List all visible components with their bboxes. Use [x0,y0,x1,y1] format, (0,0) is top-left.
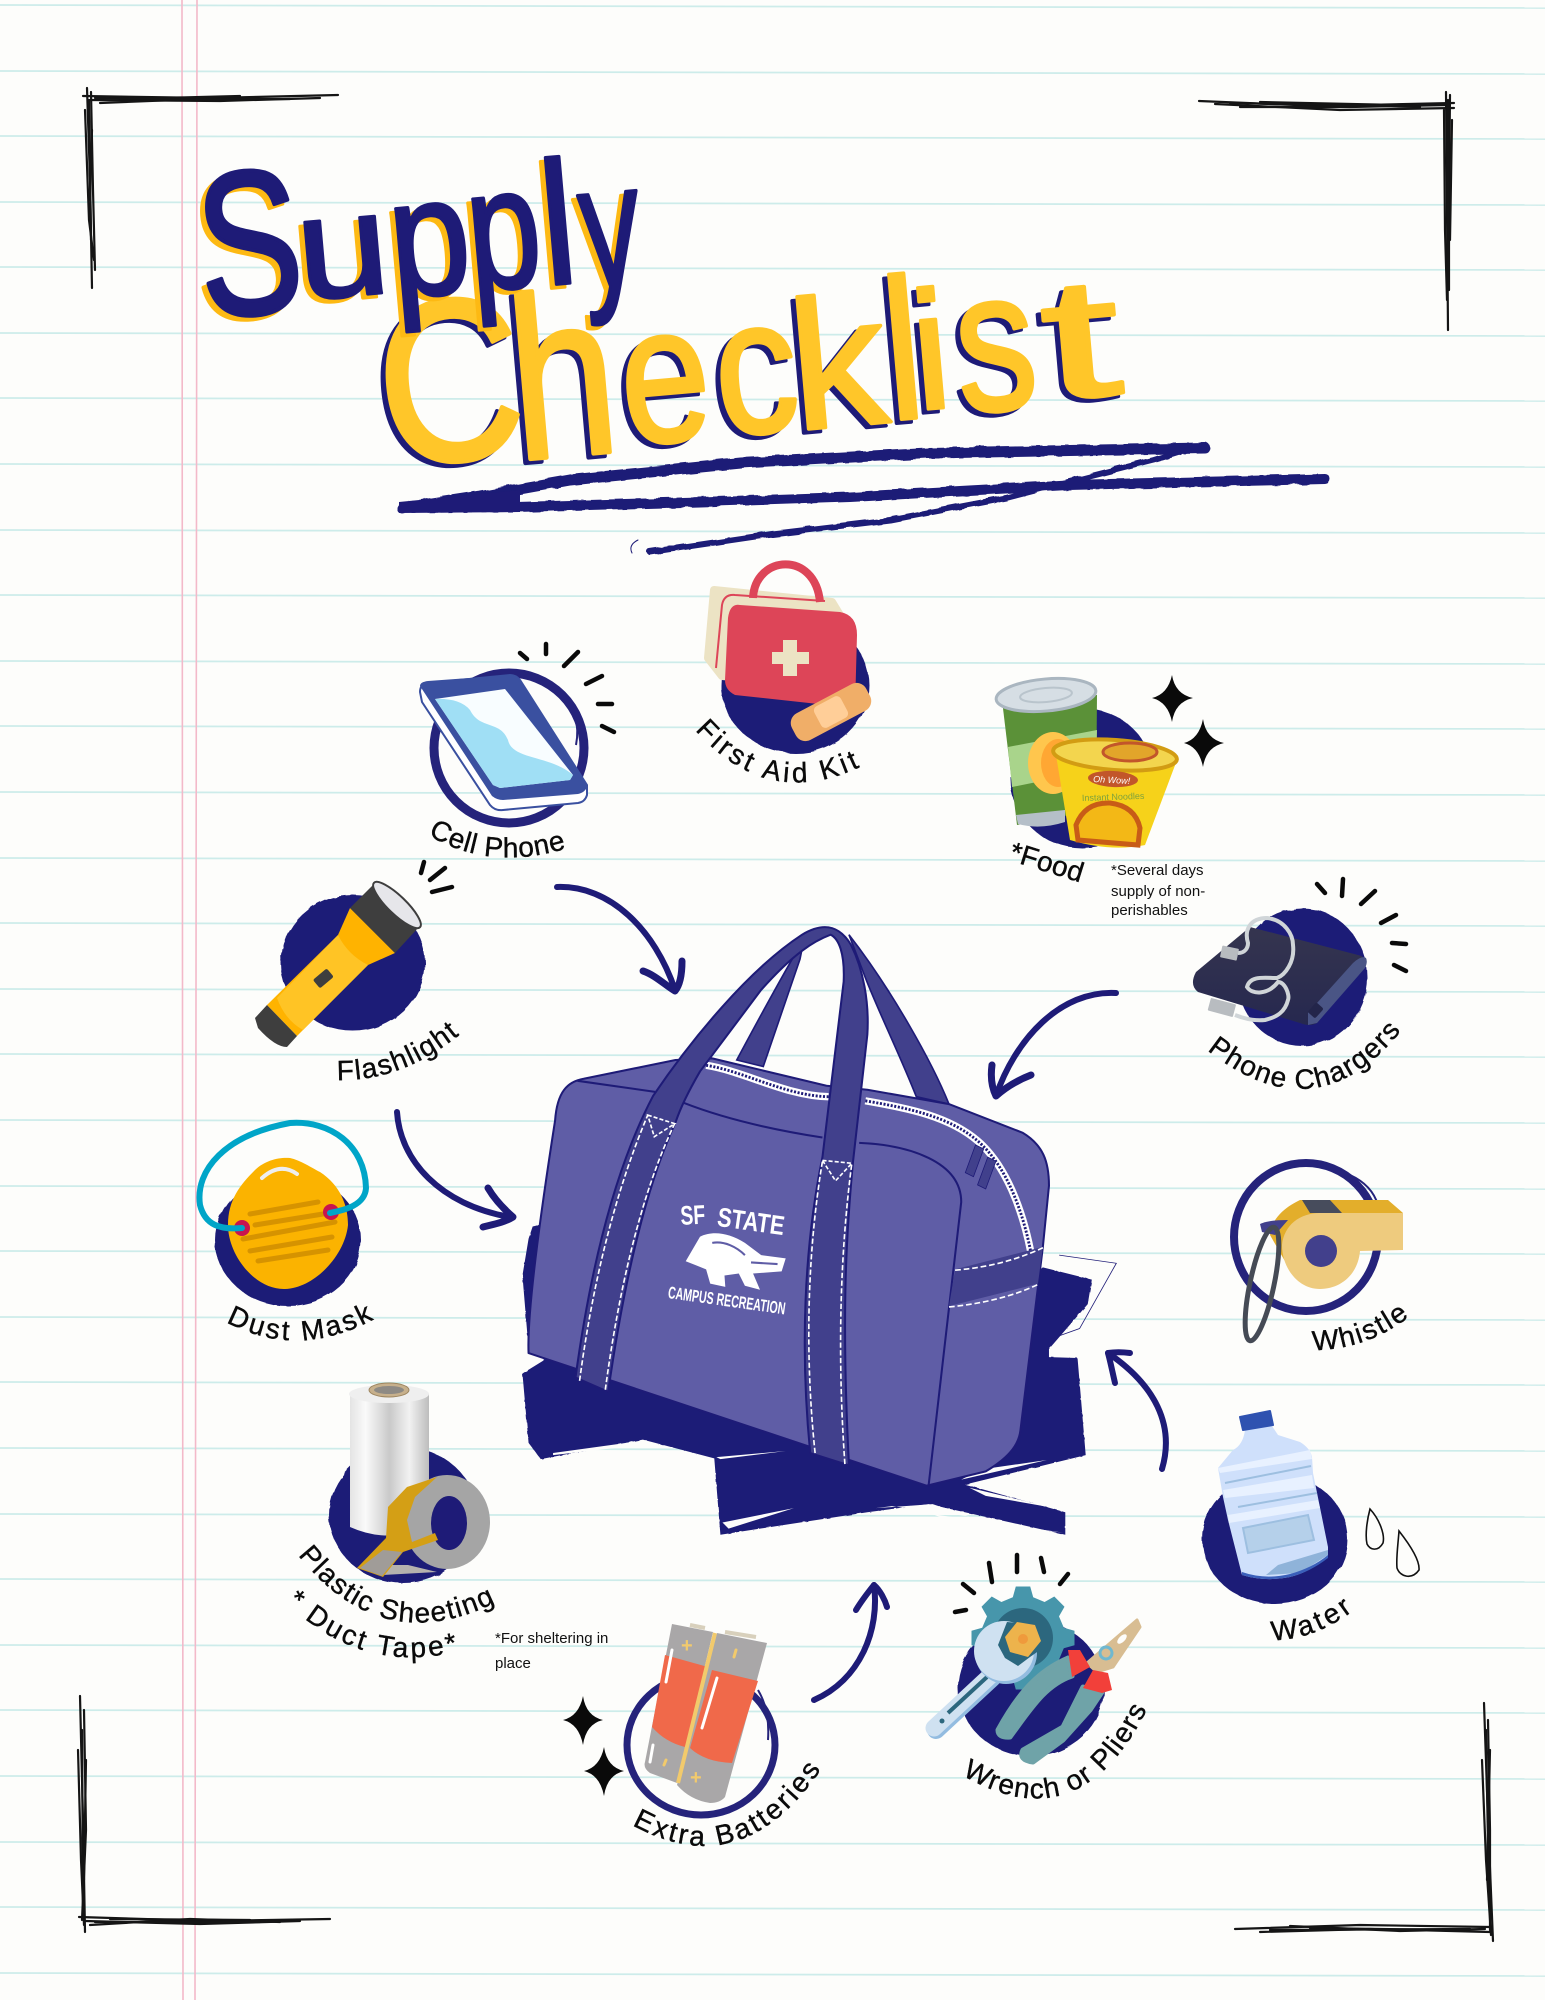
rays [421,862,452,892]
bag logo: SF State Campus Recreation: CAMPUS RECREATION [667,1284,787,1319]
bag logo: SF State Campus Recreation: STATE [715,1203,786,1242]
label: Cell Phone [432,821,564,858]
bandage [787,679,875,745]
ring [1234,1163,1378,1311]
bag stitching [580,1115,852,1464]
title word: Checklist: C [367,246,533,515]
title word: Checklist: i [904,255,958,446]
blob [958,1620,1104,1756]
item: extra batteries: + [690,1767,702,1789]
title word: Checklist: c [705,256,806,477]
label: Water [1270,1598,1350,1640]
item: food [994,675,1224,919]
label: Flashlight [338,1022,460,1080]
label: Dust Mask [228,1305,374,1341]
item: phone chargers [1192,876,1408,1090]
title word: Checklist: k [782,256,895,469]
loop [1238,1225,1286,1343]
title word: Checklist [367,227,1128,515]
item: wrench or pliers [926,1552,1146,1799]
label: Whistle [1311,1308,1407,1350]
bag logo: SF State Campus Recreation [667,1200,787,1319]
sparkles [563,1696,603,1745]
item: plastic sheeting and duct tape [294,1382,608,1672]
arrow: water to bag [1108,1352,1166,1469]
title word: Checklist: h [499,243,627,509]
note: *Several days [1111,862,1204,879]
whistle body [1270,1200,1403,1280]
bottle [1218,1426,1328,1579]
label: *Food [1012,842,1085,882]
arrow: flashlight to bag [397,1112,513,1227]
kit [708,590,846,686]
blob [1202,1474,1348,1604]
strap [234,1220,250,1236]
title word: Supply [188,124,648,362]
power bank [1193,927,1365,1025]
title word: Checklist: s [945,227,1044,456]
note: place [495,1655,531,1672]
bag front handles [576,927,868,1465]
item: food: Oh Wow! [1093,774,1131,786]
item: plastic sheeting and duct tape: * Duct Tape* [294,1590,455,1664]
title word: Checklist: t [1034,240,1128,437]
bag zipper [706,1065,1031,1251]
item: cell phone [419,642,616,858]
item: whistle [1230,1159,1407,1350]
title word: Supply: S [188,124,311,362]
noodle cup [1056,755,1177,848]
batteries [645,1624,713,1783]
note: perishables [1111,902,1188,919]
zipper pulls [965,1145,996,1189]
item: water [1202,1410,1420,1640]
arrow: chargers to bag [991,993,1116,1096]
arrow: cell phone to bag [557,887,682,991]
bag panel seams [578,1081,961,1486]
drops [1366,1509,1419,1576]
flashlight body [267,935,368,1036]
phone [420,675,587,810]
rays [955,1555,1068,1612]
title: Supply Checklist [188,124,1128,515]
title word: Checklist: e [611,262,718,486]
item: extra batteries: + [681,1635,693,1657]
title word: Supply: l [532,125,584,323]
label: Extra Batteries [634,1763,820,1846]
item: food: Instant Noodles [1082,791,1145,803]
cable [1235,918,1293,1020]
note: supply of non- [1111,883,1205,900]
label: Phone Chargers [1208,1024,1400,1090]
mask [228,1158,348,1289]
gator mark [686,1233,786,1290]
note: *For sheltering in [495,1630,608,1647]
bag back handle [737,935,949,1104]
title word: Supply: p [458,129,548,328]
duffel bag [528,927,1049,1486]
blob [281,895,425,1031]
can [1002,695,1097,825]
blob [1237,908,1367,1046]
item: extra batteries [563,1623,820,1846]
bag side band [949,1247,1043,1306]
gear [972,1586,1074,1690]
arrow: batteries to bag [814,1585,887,1700]
rays [1317,879,1406,971]
label: First Aid Kit [696,718,860,783]
sparkles [1152,675,1193,722]
film roll [350,1394,429,1536]
blob [721,617,869,753]
item: first aid kit [696,560,872,783]
bag brush background [522,1222,1116,1535]
labels: Plastic Sheeting [299,1544,495,1623]
title underline scribble [399,448,1325,553]
title word: Checklist: l [874,237,931,463]
bag logo: SF State Campus Recreation: SF [680,1200,706,1231]
bag body [528,1058,1049,1486]
blob [1010,708,1154,848]
wrench [936,1678,992,1730]
pliers [998,1658,1102,1762]
ring [627,1675,775,1815]
rays [520,644,614,732]
item: dust mask [196,1120,374,1341]
nut [1005,1622,1041,1657]
duct tape [383,1565,437,1575]
title word: Supply: u [290,161,395,332]
ring [434,673,584,823]
title word: Supply: y [571,125,648,327]
label: Wrench or Pliers [966,1704,1146,1799]
blob [215,1174,361,1306]
item: flashlight [255,860,460,1080]
blob [329,1447,477,1583]
title word: Supply: p [381,141,478,334]
